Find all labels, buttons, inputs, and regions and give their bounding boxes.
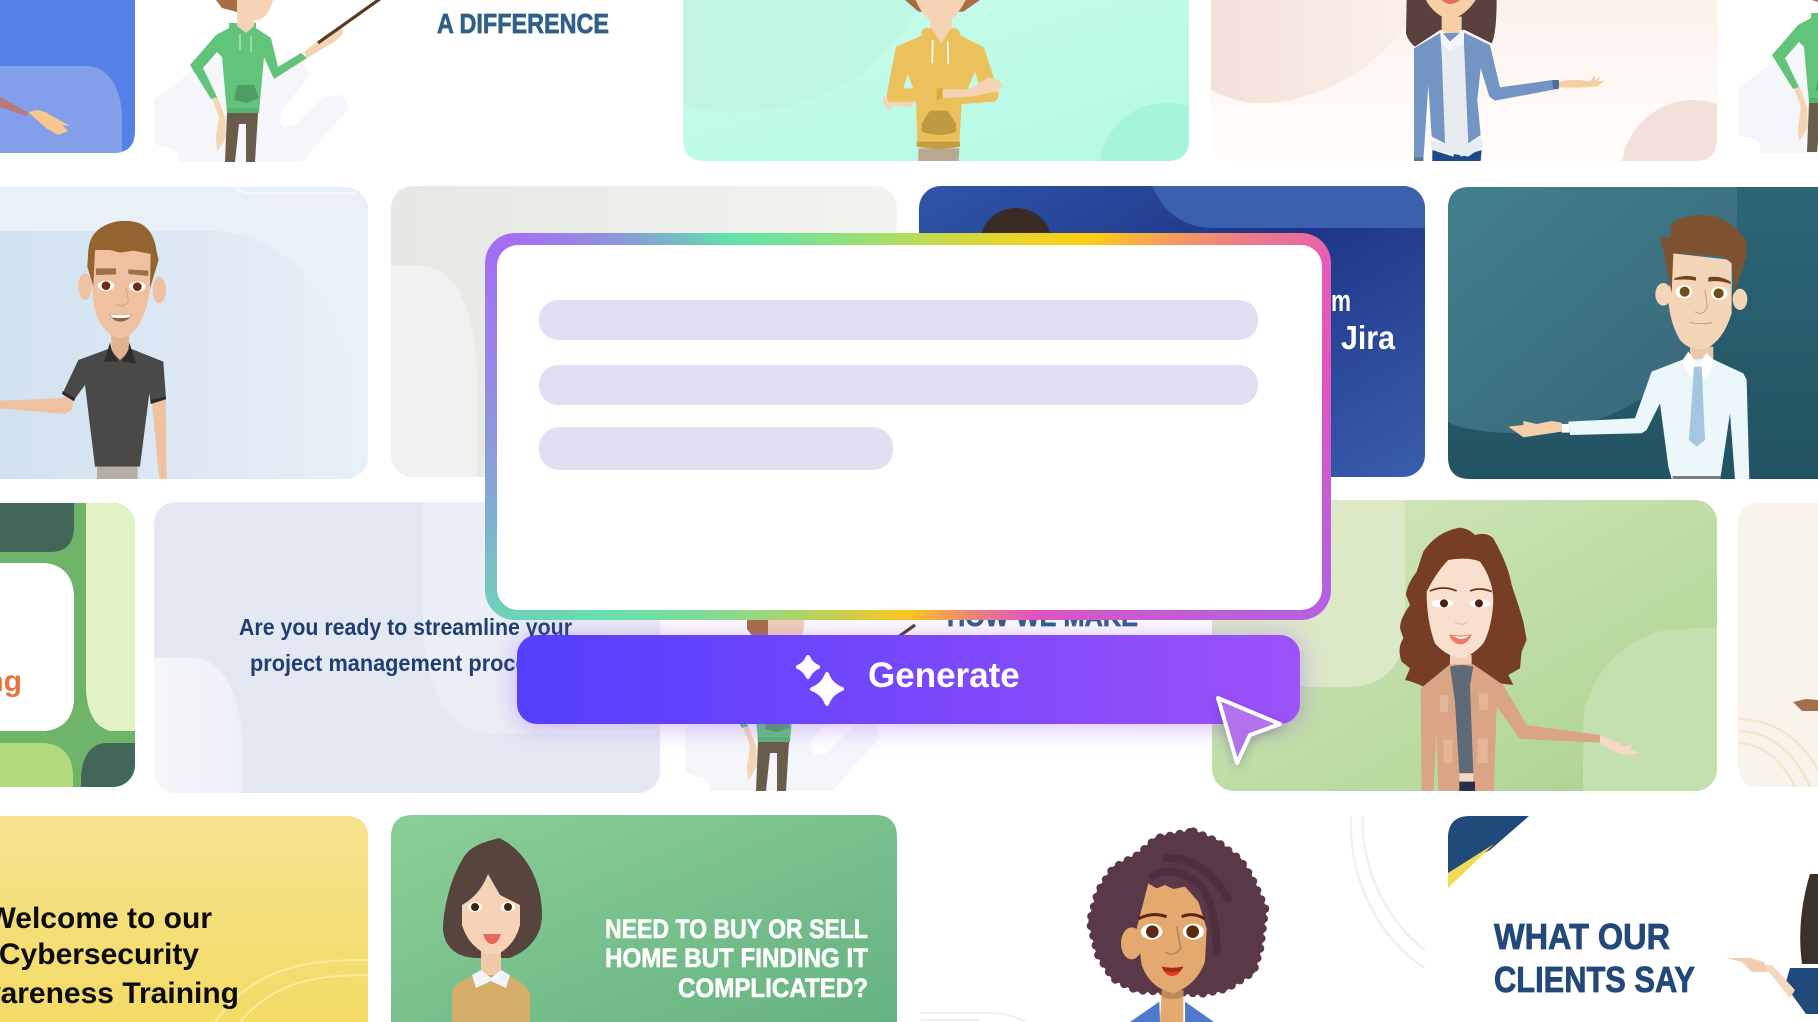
icon: sparkles xyxy=(796,654,844,706)
card: partial green man xyxy=(1736,0,1818,153)
text fragments: m xyxy=(1331,283,1351,318)
card: cream with hand xyxy=(1738,503,1818,787)
question text xyxy=(606,919,868,998)
question text: project management process? xyxy=(250,650,565,676)
figure: man in shirt and tie xyxy=(1508,215,1749,479)
figure: woman with short hair xyxy=(443,838,542,1022)
training title xyxy=(0,902,239,1010)
figure: woman with wavy hair xyxy=(1400,528,1640,791)
question text: HOME BUT FINDING IT xyxy=(605,943,868,973)
placeholder line 1 xyxy=(538,300,1258,340)
card: light green with brown-haired woman xyxy=(1212,500,1717,791)
text fragments xyxy=(1332,294,1396,350)
input white area xyxy=(496,245,1322,610)
text fragments: Jira xyxy=(1341,319,1396,356)
question text: Are you ready to streamline your xyxy=(239,614,572,640)
card: yellow cybersecurity training xyxy=(0,816,368,1022)
question text xyxy=(239,614,572,676)
card: green graphic with orange text xyxy=(0,503,135,787)
question text: NEED TO BUY OR SELL xyxy=(605,914,868,944)
card: white with curly-haired woman xyxy=(919,815,1425,1022)
generate button xyxy=(517,635,1300,724)
training title: Cybersecurity xyxy=(0,938,199,971)
heading: what our clients say: CLIENTS SAY xyxy=(1494,959,1695,1000)
placeholder line 2 xyxy=(538,365,1258,405)
card: man in grey polo xyxy=(0,187,368,479)
card: blue with hand xyxy=(0,0,135,153)
card: lavender with streamline question xyxy=(154,502,660,793)
card: man in green hoodie with A DIFFERENCE heading xyxy=(154,0,608,162)
heading fragment: HOW WE MAKE xyxy=(947,601,1138,632)
placeholder line 3 xyxy=(538,427,892,470)
figure: woman with afro xyxy=(1090,832,1265,1022)
card: green with woman, buy or sell question xyxy=(391,815,897,1022)
heading: what our clients say: WHAT OUR xyxy=(1494,916,1670,957)
card: navy with Jira text xyxy=(919,186,1425,477)
prompt input panel with rainbow border xyxy=(485,233,1331,620)
heading: A DIFFERENCE: A DIFFERENCE xyxy=(437,8,609,39)
figure: man in polo xyxy=(0,188,357,479)
card: mint with yellow hoodie man xyxy=(683,0,1189,161)
card: green hoodie man pointing, HOW WE MAKE xyxy=(685,620,1138,791)
button label: Generate xyxy=(868,656,1020,695)
card: what our clients say xyxy=(1448,816,1818,1022)
card: teal with man in white shirt xyxy=(1448,187,1818,479)
card: cream with woman in blue blazer xyxy=(1211,0,1717,161)
heading: what our clients say xyxy=(1494,923,1695,993)
card: grey placeholder xyxy=(391,186,897,477)
figure: yellow hoodie man xyxy=(883,0,1003,161)
question text: COMPLICATED? xyxy=(678,973,868,1003)
figure: woman in blazer xyxy=(1406,0,1605,161)
